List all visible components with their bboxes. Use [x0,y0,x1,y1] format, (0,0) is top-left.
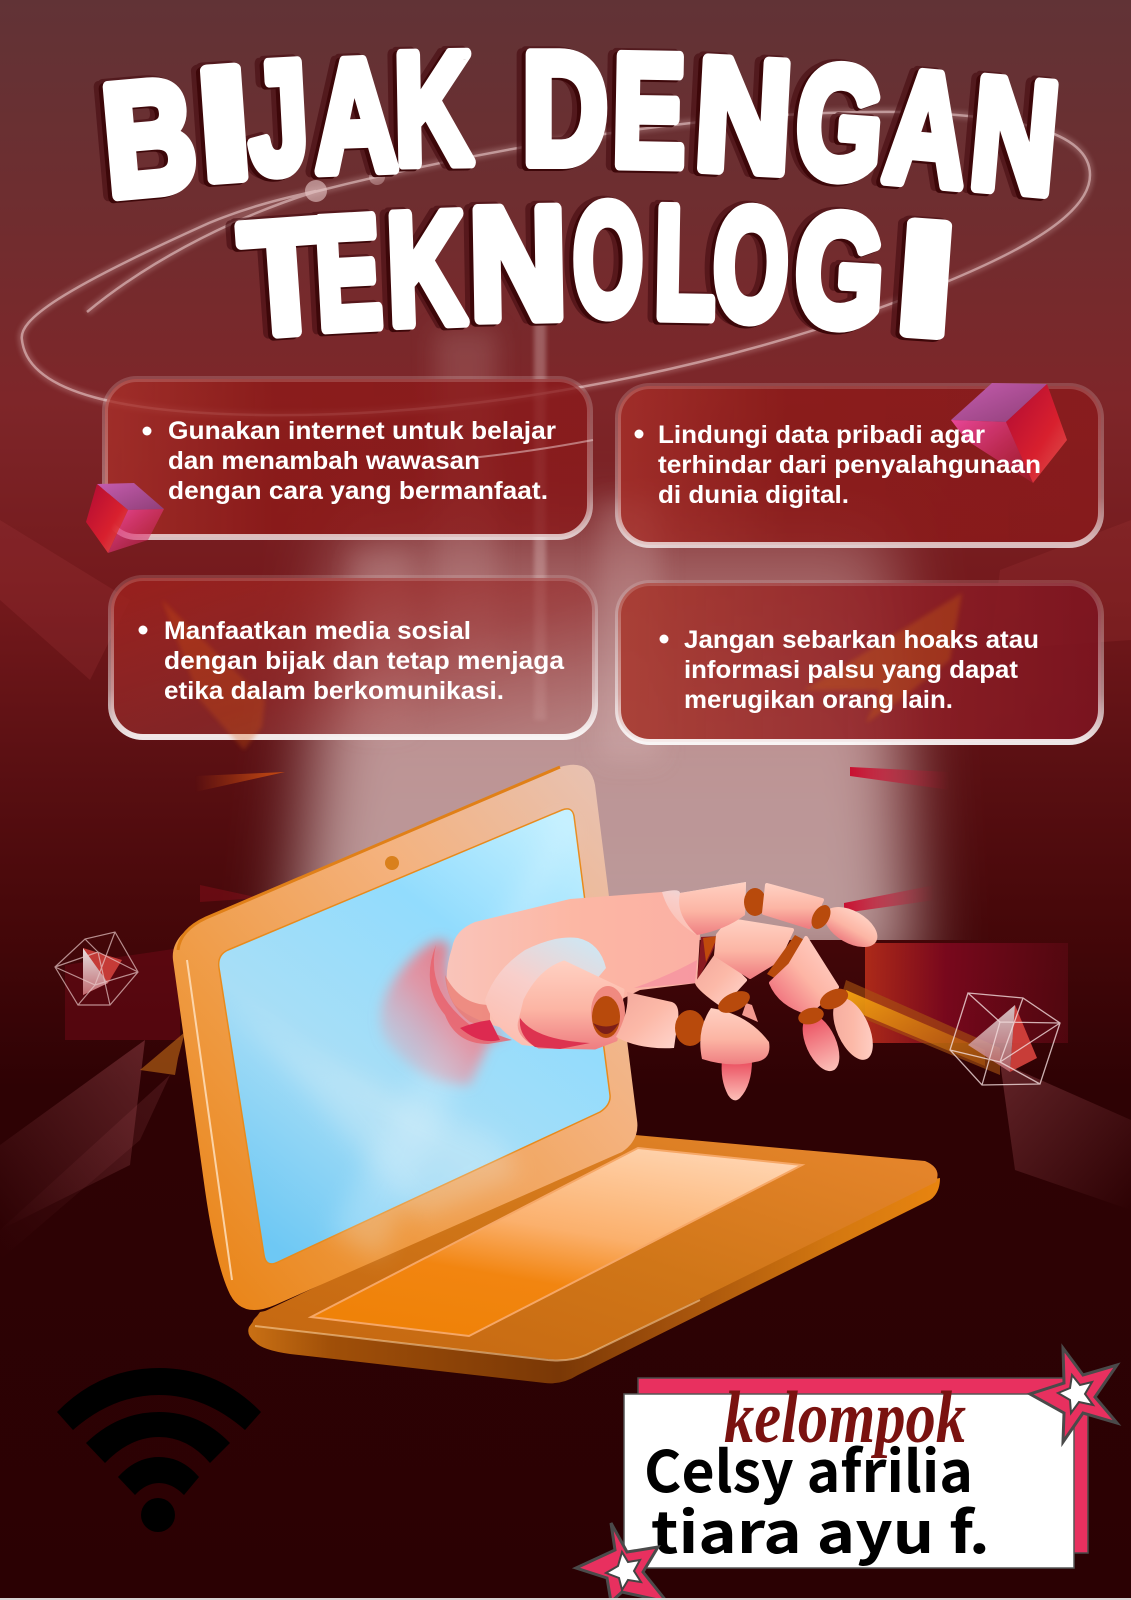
names: tiara ayu f. [651,1488,990,1570]
orange shard in card 4 [804,593,962,723]
palm [447,892,700,1030]
finger 1 [662,882,884,955]
crimson wrist crease [460,1020,500,1041]
star top right [1030,1348,1117,1442]
orange shard in card 3 [162,600,265,750]
title line 1: BIJAK DENGAN: J [244,28,313,207]
bullet [138,626,148,634]
title line 1: BIJAK DENGAN: N [964,44,1065,228]
page edge [0,1598,1131,1600]
finger tip right [825,992,881,1066]
laptop [173,765,940,1383]
panel: card 2 data pribadi [618,383,1101,545]
wrist shadow [430,945,512,1044]
title line 1: BIJAK DENGAN: A [879,38,975,221]
title line 2: TEKNOLOGI [236,173,960,369]
under fingertip [722,1060,752,1100]
laptop lid [173,765,637,1310]
text block: terhindar dari penyalahgunaan [658,451,1041,479]
title line 2: TEKNOLOGI: E [311,182,385,362]
thumb base [519,962,623,1048]
finger 2 [716,920,881,1077]
orange beam left [140,1032,185,1075]
text block: Jangan sebarkan hoaks atau [684,626,1039,654]
orbit ring [22,112,1090,415]
pale shards lower right [1000,1062,1131,1210]
text block [684,626,1039,714]
camera [385,856,399,870]
text block: informasi palsu yang dapat [684,656,1019,684]
names [644,1427,990,1570]
pale shards lower left [0,1040,170,1260]
red panel behind right cube [865,943,1068,1043]
hand shadow on screen [380,940,505,1085]
title line 1: BIJAK DENGAN: A [311,26,399,206]
title line 2: TEKNOLOGI: I [891,188,960,369]
finger tip left [795,1009,847,1077]
text block: Lindungi data pribadi agar [658,421,985,449]
white front panel [624,1394,1074,1568]
text block: di dunia digital. [658,481,849,509]
screen [219,809,610,1264]
icon: wifi [57,1368,261,1532]
title line 1: BIJAK DENGAN: G [791,32,889,214]
text block: dengan cara yang bermanfaat. [168,477,548,505]
bullet [634,430,644,438]
title line 2: TEKNOLOGI: K [384,179,468,358]
title line 2: TEKNOLOGI: L [653,173,717,351]
panel: card 3 media sosial [111,578,595,750]
icon: small pink cube left [86,483,164,553]
thumb joint [591,986,625,1038]
icon: wire cube left [55,932,138,1005]
text block [658,421,1041,509]
title line 1: BIJAK DENGAN [96,20,1065,230]
background light haze and rays [290,300,915,980]
title line 1: BIJAK DENGAN: I [192,34,256,214]
title line 1: BIJAK DENGAN: E [611,21,687,199]
keyboard [311,1148,802,1336]
orange beam right [838,980,1000,1075]
title line 1: BIJAK DENGAN: D [522,20,608,197]
text block [164,617,565,705]
title line 2: TEKNOLOGI: O [573,173,643,348]
thumb cuff [485,938,606,1047]
panel: card 4 hoaks [618,583,1101,742]
text block: merugikan orang lain. [684,686,953,714]
panel: card 1 internet [105,379,593,537]
text block: Manfaatkan media sosial [164,617,471,645]
title line 1: BIJAK DENGAN: N [691,25,796,206]
script heading: kelompok [724,1377,966,1459]
title line 2: TEKNOLOGI: T [236,188,331,369]
names: Celsy afrilia [644,1427,973,1509]
text block: etika dalam berkomunikasi. [164,677,504,705]
orbit line over card 1 [470,440,593,458]
icon: pink cube top right [951,383,1067,483]
title line 1: BIJAK DENGAN: K [393,20,473,198]
title [96,20,1065,369]
thumb segment 2 [616,992,678,1048]
text block: Gunakan internet untuk belajar [168,417,556,445]
finger 3 [697,936,753,1017]
pink back panel [638,1378,1088,1553]
title line 2: TEKNOLOGI: G [791,181,889,362]
thumb tip [700,1008,769,1064]
text block: dan menambah wawasan [168,447,480,475]
laptop base [248,1135,940,1383]
text block [168,417,556,505]
background shards and streaks [0,520,1131,913]
bullet [660,634,668,644]
bullet [142,426,152,436]
thumb joint 2 [675,1010,705,1046]
star bottom left [576,1523,667,1600]
icon: wire cube right [950,993,1060,1085]
title line 1: BIJAK DENGAN: B [96,46,202,230]
title line 2: TEKNOLOGI: N [468,175,568,353]
screen light rays [330,815,572,1258]
text block: dengan bijak dan tetap menjaga [164,647,565,675]
robot hand [380,882,884,1100]
title line 2: TEKNOLOGI: O [710,175,791,354]
red panel behind left cube [65,948,180,1040]
panel: kelompok name card [576,1348,1117,1600]
